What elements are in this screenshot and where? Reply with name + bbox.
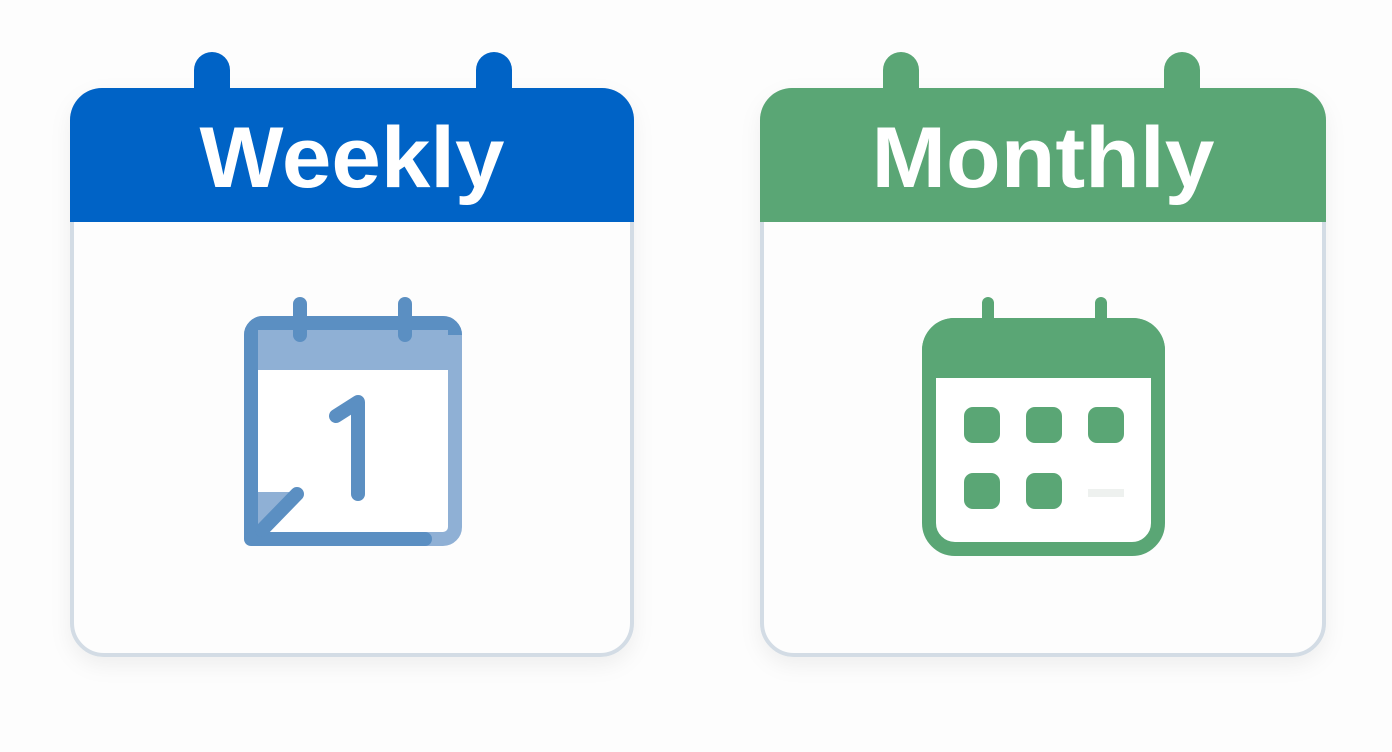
- icon: month calendar grid: [922, 303, 1165, 549]
- header band: [70, 88, 634, 222]
- panel: monthly card: [760, 52, 1326, 655]
- card body: [72, 90, 632, 655]
- panel: weekly card: [70, 52, 634, 655]
- ring tabs: [883, 52, 1200, 112]
- heading: Weekly: Weekly: [200, 110, 505, 206]
- heading: Monthly: Monthly: [872, 110, 1215, 206]
- header band: [760, 88, 1326, 222]
- number 1: [336, 402, 358, 494]
- card body: [762, 90, 1324, 655]
- ring tabs: [194, 52, 512, 112]
- icon: single-day calendar: [251, 304, 455, 539]
